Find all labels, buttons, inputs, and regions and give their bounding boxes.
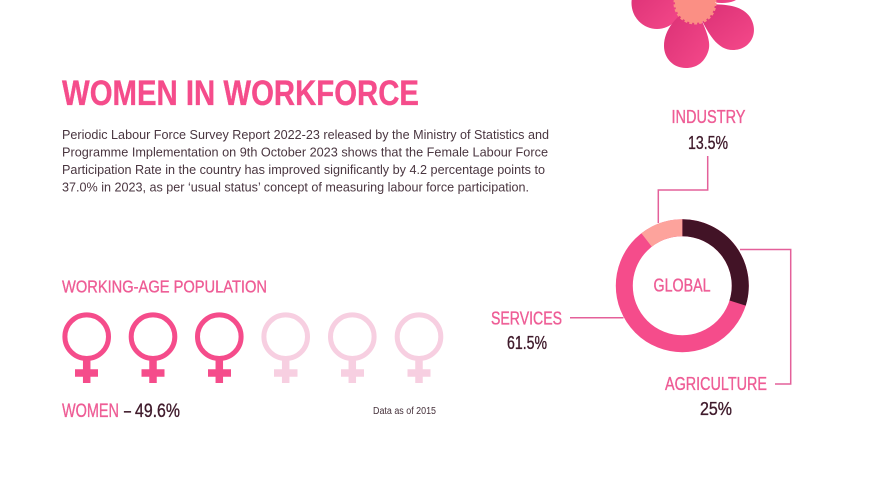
icon: flower decoration bbox=[632, 0, 754, 68]
label: women share: WOMEN bbox=[62, 401, 119, 422]
callout: services: SERVICES bbox=[491, 308, 562, 328]
icon: female symbol 4 (faded) bbox=[264, 315, 308, 383]
description text block: Participation Rate in the country has improved significantly by 4.2 percentage points to bbox=[62, 162, 545, 177]
description text block: Programme Implementation on 9th October 2023 shows that the Female Labour Force bbox=[62, 144, 548, 160]
icon: female symbol 5 (faded) bbox=[330, 315, 374, 383]
data note: Data as of 2015 bbox=[373, 406, 436, 417]
callout: industry bbox=[658, 107, 746, 223]
icon: female symbol 3 (filled) bbox=[198, 315, 241, 383]
segment: agriculture bbox=[682, 228, 740, 303]
segment: industry bbox=[647, 228, 682, 240]
icon: female symbol 2 (filled) bbox=[131, 315, 175, 383]
callout: agriculture bbox=[665, 250, 791, 419]
callout: industry: INDUSTRY bbox=[672, 107, 746, 127]
callout: services: 61.5% bbox=[507, 333, 547, 353]
label: women share bbox=[62, 401, 180, 422]
donut centre label: GLOBAL bbox=[654, 276, 710, 296]
icon row: female symbols bbox=[65, 315, 441, 383]
label: women share: 49.6% bbox=[135, 401, 180, 422]
title: WOMEN IN WORKFORCE bbox=[62, 74, 419, 113]
callout: agriculture: AGRICULTURE bbox=[665, 374, 767, 394]
description text block bbox=[62, 127, 549, 194]
segment: services bbox=[624, 228, 740, 344]
description text block: 37.0% in 2023, as per ‘usual status’ concept of measuring labour force participation. bbox=[62, 180, 529, 194]
icon: female symbol 6 (faded) bbox=[397, 315, 441, 383]
donut chart bbox=[624, 228, 740, 344]
heading: working-age population: WORKING-AGE POPULATION bbox=[62, 276, 267, 296]
callout: services bbox=[491, 308, 624, 353]
callout: agriculture: 25% bbox=[700, 399, 732, 419]
label: women share: – bbox=[124, 401, 131, 422]
description text block: Periodic Labour Force Survey Report 2022-23 released by the Ministry of Statistics and bbox=[62, 127, 549, 142]
icon: female symbol 1 (filled) bbox=[65, 315, 108, 383]
callout: industry: 13.5% bbox=[688, 133, 728, 153]
